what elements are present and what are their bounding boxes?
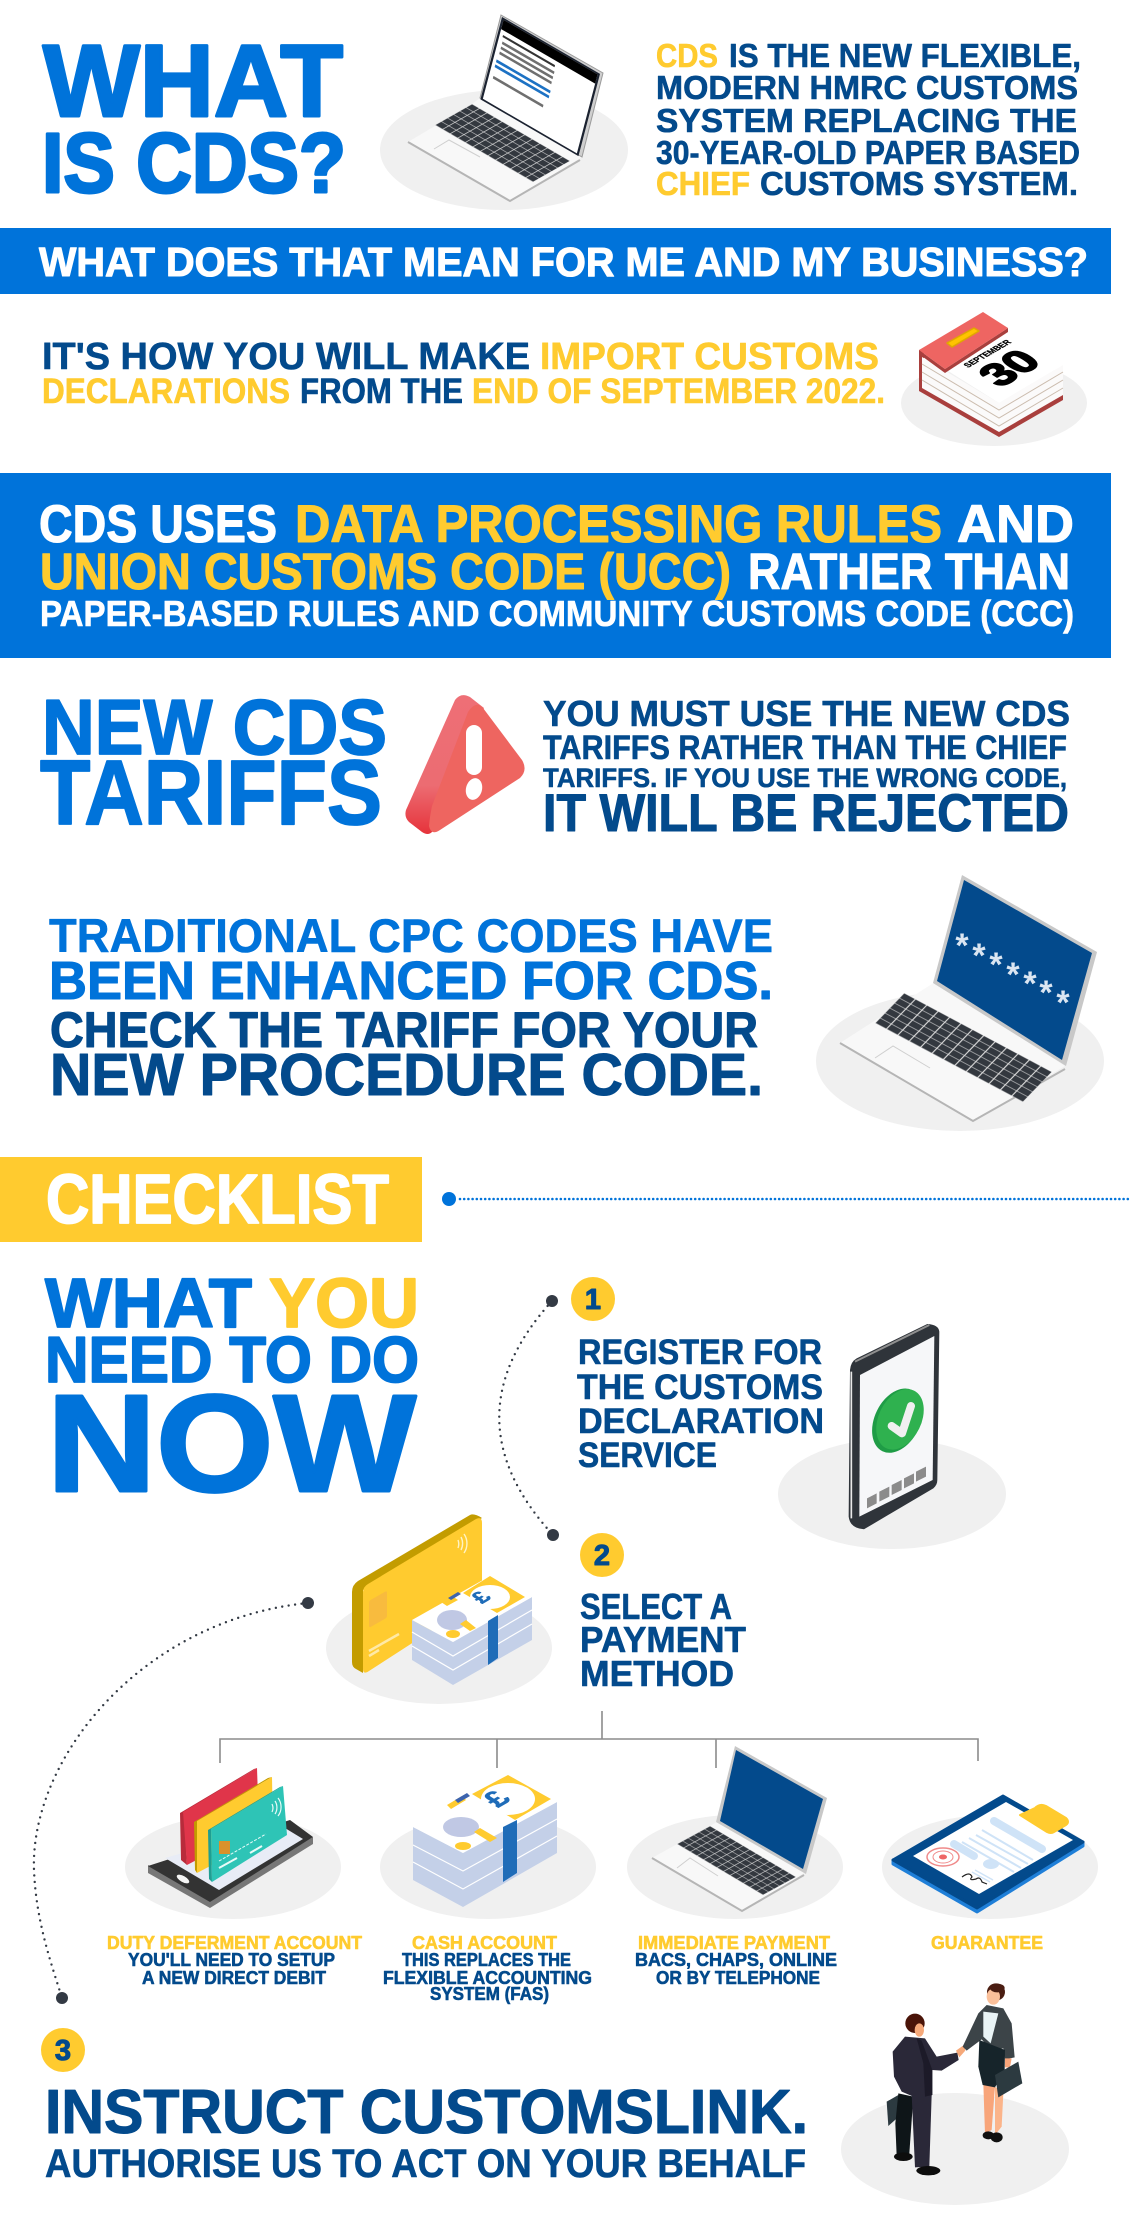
text: guarantee: GUARANTEE: [931, 1933, 1043, 1953]
heading: what you need to do now: YOU: [269, 1264, 419, 1342]
title: what is CDS: [42, 24, 346, 210]
text: immediate payment: IMMEDIATE PAYMENT: [638, 1933, 830, 1953]
text: instruct customslink: AUTHORISE US TO ACT ON YOUR BEHALF: [45, 2142, 806, 2186]
illustration: calendar 30 September: [901, 312, 1087, 446]
banner: data processing rules: DATA PROCESSING RULES: [295, 495, 942, 554]
text: cash account: THIS REPLACES THE: [402, 1950, 571, 1970]
text: select payment method: [580, 1586, 746, 1694]
text: duty deferment account: A NEW DIRECT DEBIT: [142, 1968, 326, 1988]
illustration: laptop with password: *: [1056, 984, 1070, 1022]
text block: import declarations date: FROM THE: [300, 372, 463, 411]
text block: import declarations date: DECLARATIONS: [42, 372, 290, 411]
text: cash account: SYSTEM (FAS): [430, 1984, 549, 2004]
text block: CPC codes: CHECK THE TARIFF FOR YOUR: [50, 1002, 758, 1058]
step 3 badge: [41, 2028, 85, 2072]
text block: import declarations date: IMPORT CUSTOMS: [540, 336, 879, 378]
heading: what you need to do now: WHAT: [45, 1264, 252, 1342]
step 1 badge: [571, 1277, 615, 1321]
illustration: laptop with password: [816, 875, 1104, 1131]
illustration: phone with three cards: [125, 1768, 341, 1919]
title: what is CDS: IS CDS?: [42, 116, 346, 210]
text: select payment method: SELECT A: [580, 1586, 732, 1627]
banner: data processing rules: [0, 473, 1111, 658]
text block: CDS description: CUSTOMS SYSTEM.: [760, 165, 1078, 202]
text: select payment method: METHOD: [580, 1653, 734, 1694]
heading: what you need to do now: NEED TO DO: [45, 1323, 419, 1396]
illustration: laptop with password: *: [1039, 974, 1053, 1012]
text block: import declarations date: [42, 336, 885, 411]
banner: data processing rules: CDS USES: [39, 495, 277, 554]
text: cash account: [383, 1933, 592, 2004]
step 2 badge: 2: [594, 1540, 610, 1572]
illustration: laptop for immediate payment: [627, 1746, 843, 1919]
text: register step: DECLARATION: [578, 1402, 824, 1441]
illustration: credit card and banknotes: £: [465, 1588, 497, 1607]
text block: CDS description: CHIEF: [656, 165, 750, 202]
banner: data processing rules: RATHER THAN: [748, 543, 1070, 600]
heading: new CDS tariffs: TARIFFS: [40, 742, 382, 844]
illustration: phone with green check: [778, 1324, 1006, 1549]
text block: CDS description: CDS: [656, 37, 718, 74]
text block: CPC codes: [49, 909, 773, 1108]
step 3 badge: 3: [55, 2035, 71, 2067]
heading: new CDS tariffs: [40, 683, 387, 844]
text block: CPC codes: NEW PROCEDURE CODE.: [50, 1042, 763, 1108]
text block: CDS description: MODERN HMRC CUSTOMS: [656, 69, 1078, 106]
text: immediate payment: OR BY TELEPHONE: [656, 1968, 820, 1988]
illustration: banknotes: [380, 1775, 596, 1919]
text: duty deferment account: DUTY DEFERMENT ACCOUNT: [107, 1933, 362, 1953]
text: register step: REGISTER FOR: [578, 1333, 822, 1372]
text: immediate payment: [635, 1933, 837, 1988]
text: cash account: FLEXIBLE ACCOUNTING: [383, 1968, 592, 1988]
illustration: laptop with customs form: [380, 15, 628, 210]
text: register step: SERVICE: [578, 1436, 717, 1475]
banner: data processing rules: UNION CUSTOMS CODE (UCC): [40, 543, 731, 600]
text block: CDS description: 30-YEAR-OLD PAPER BASED: [656, 134, 1080, 171]
banner: what does that mean: WHAT DOES THAT MEAN FOR ME AND MY BUSINESS?: [39, 239, 1088, 285]
step 2 badge: [580, 1533, 624, 1577]
banner: checklist: CHECKLIST: [46, 1160, 389, 1238]
illustration: business handshake: [841, 1983, 1069, 2205]
illustration: laptop with password: *: [1006, 956, 1020, 994]
illustration: laptop with password: *: [1023, 965, 1037, 1003]
arrow: dotted arc from step 2 to step 3: [34, 1597, 314, 2004]
illustration: guarantee clipboard: [882, 1796, 1098, 1919]
dotted rule after checklist: [442, 1192, 1130, 1206]
text block: CDS description: IS THE NEW FLEXIBLE,: [729, 37, 1081, 74]
heading: what you need to do now: NOW: [47, 1367, 417, 1521]
text block: tariffs warning: TARIFFS RATHER THAN THE CHIEF: [543, 729, 1067, 767]
text block: tariffs warning: [543, 693, 1070, 843]
text block: CPC codes: TRADITIONAL CPC CODES HAVE: [49, 909, 773, 962]
illustration: calendar 30 September: 30: [968, 343, 1051, 393]
arrow: dotted arc from step 1 to step 2: [499, 1295, 559, 1541]
text block: tariffs warning: IT WILL BE REJECTED: [543, 784, 1069, 843]
text block: tariffs warning: YOU MUST USE THE NEW CDS: [543, 693, 1070, 734]
text: register step: [577, 1333, 824, 1475]
text: cash account: CASH ACCOUNT: [412, 1933, 557, 1953]
text block: CPC codes: BEEN ENHANCED FOR CDS.: [49, 951, 773, 1011]
icon: warning triangle: [405, 695, 525, 834]
text: immediate payment: BACS, CHAPS, ONLINE: [635, 1950, 837, 1970]
text: duty deferment account: [107, 1933, 362, 1988]
title: what is CDS: WHAT: [43, 24, 343, 138]
illustration: credit card and banknotes: [326, 1514, 552, 1704]
illustration: laptop with password: *: [955, 927, 969, 965]
text: instruct customslink: [45, 2078, 808, 2186]
illustration: calendar 30 September: SEPTEMBER: [961, 338, 1014, 369]
text: duty deferment account: YOU'LL NEED TO SETUP: [128, 1950, 335, 1970]
text block: import declarations date: IT'S HOW YOU WILL MAKE: [42, 336, 530, 378]
text block: tariffs warning: TARIFFS. IF YOU USE THE WRONG CODE,: [543, 763, 1067, 793]
illustration: banknotes: £: [476, 1786, 519, 1812]
banner: data processing rules: AND: [957, 495, 1074, 554]
text: instruct customslink: INSTRUCT CUSTOMSLINK.: [45, 2078, 808, 2147]
step 1 badge: 1: [585, 1284, 601, 1316]
text block: CDS description: SYSTEM REPLACING THE: [656, 102, 1077, 139]
illustration: laptop with password: *: [989, 946, 1003, 984]
text block: import declarations date: END OF SEPTEMBER 2022.: [472, 372, 885, 411]
banner: what does that mean: [0, 228, 1111, 294]
text block: CDS description: [656, 37, 1081, 202]
heading: what you need to do now: [45, 1264, 419, 1521]
tree connector: payment options: [220, 1711, 978, 1768]
illustration: laptop with password: *: [972, 937, 986, 975]
text: register step: THE CUSTOMS: [577, 1368, 823, 1407]
heading: new CDS tariffs: NEW CDS: [42, 683, 387, 771]
text: select payment method: PAYMENT: [580, 1619, 746, 1660]
